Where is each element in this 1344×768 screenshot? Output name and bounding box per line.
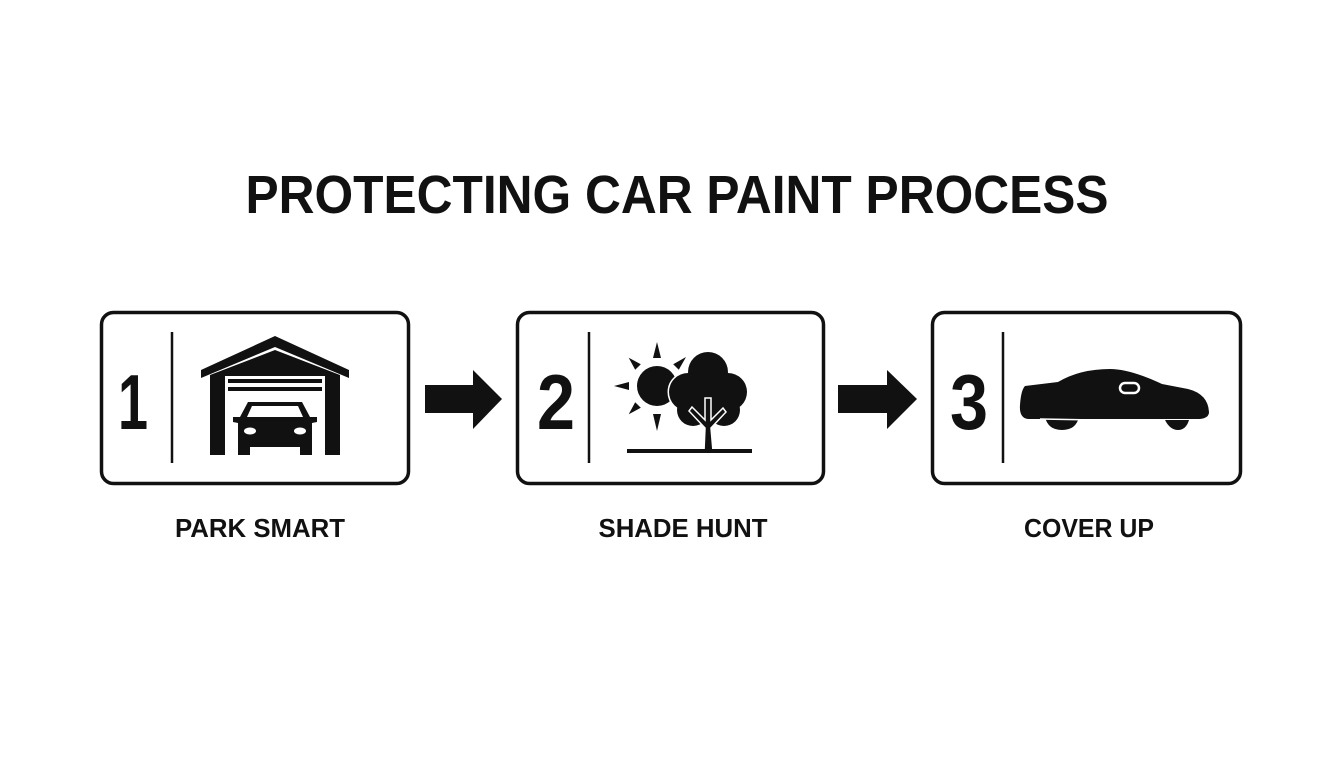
icon: garage with car xyxy=(201,336,349,455)
number 2: 2 xyxy=(537,358,575,446)
arrow 1 xyxy=(425,370,502,429)
panel: step 3 cover up xyxy=(932,312,1240,484)
panel: step 1 park smart xyxy=(102,312,408,484)
label: park smart: PARK SMART xyxy=(175,513,345,543)
title: PROTECTING CAR PAINT PROCESS xyxy=(246,165,1108,225)
label: cover up: COVER UP xyxy=(1024,513,1154,543)
icon: covered car xyxy=(1020,369,1209,430)
arrow 2 xyxy=(838,370,917,429)
icon: sun and tree xyxy=(614,342,752,453)
number 3: 3 xyxy=(950,358,988,446)
panel: step 2 shade hunt xyxy=(518,312,824,484)
number 1: 1 xyxy=(118,358,148,446)
label: shade hunt: SHADE HUNT xyxy=(598,513,768,543)
